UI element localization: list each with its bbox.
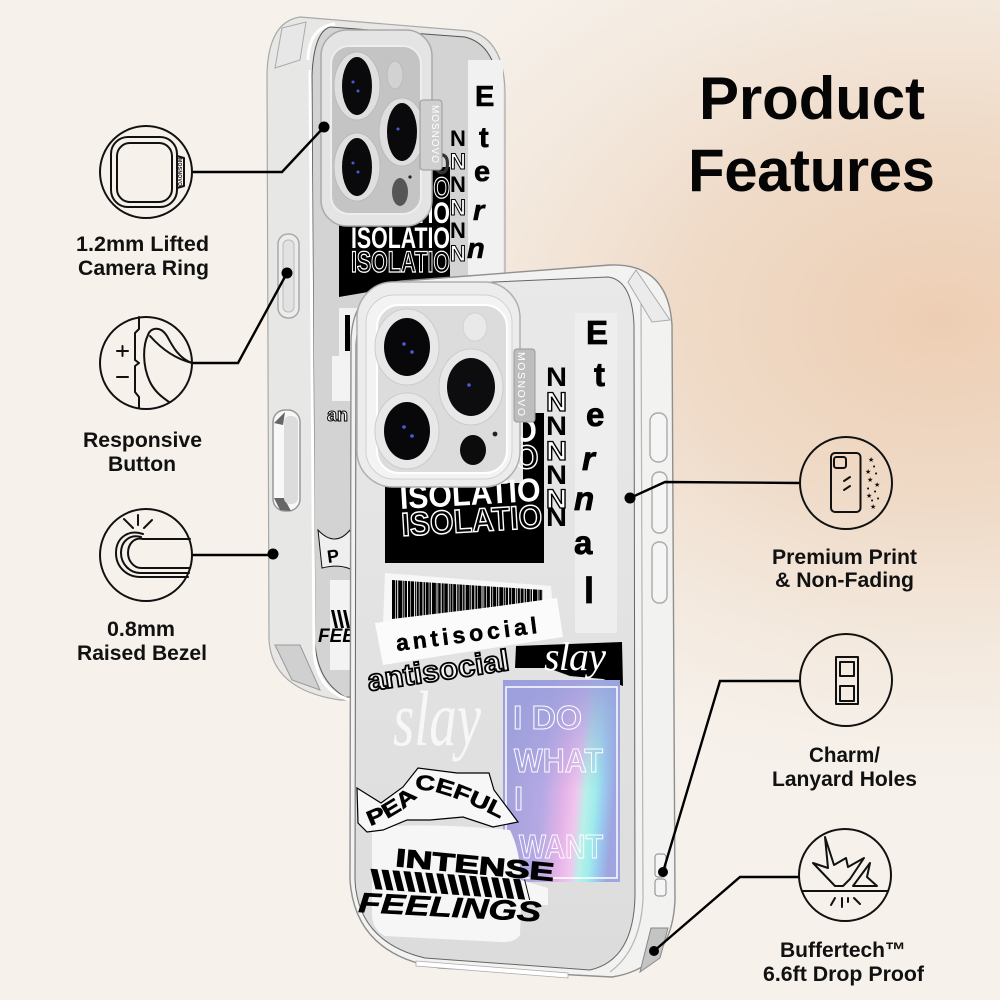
connector: lanyard holes: [658, 681, 800, 877]
front phone back panel: [355, 277, 635, 970]
front phone case body: [350, 265, 675, 977]
isolation repeated text: ISOLATIO: [400, 498, 543, 543]
barcode sticker: [383, 573, 553, 625]
back phone camera tab: MOSNOVO: [429, 105, 440, 163]
isolation repeated text: ISOLATIO: [397, 438, 540, 483]
icon: camera ring: [100, 126, 192, 218]
holographic card: I: [514, 780, 523, 817]
eternal letters: [574, 314, 608, 611]
isolation block: [385, 413, 544, 563]
label: responsive button: Button: [108, 453, 176, 476]
eternal letters: r: [582, 440, 597, 477]
label: camera ring: Camera Ring: [78, 257, 209, 280]
isolation repeated text: [392, 361, 543, 543]
icon: impact: [799, 829, 891, 921]
label: drop proof: Buffertech™: [780, 939, 906, 962]
repeated N column: N: [546, 387, 567, 417]
back phone white strip: [468, 60, 503, 285]
feature: premium print: [772, 437, 917, 592]
label: drop proof: 6.6ft Drop Proof: [763, 963, 925, 986]
back phone isolation text: ISOLATIO: [351, 246, 450, 279]
label: lanyard holes: [772, 744, 917, 791]
back phone case body: [267, 17, 505, 700]
front phone bottom-right bumper: [640, 928, 668, 972]
peaceful ribbon: PEACEFUL: [366, 775, 501, 826]
feature: responsive button: [83, 317, 202, 476]
isolation repeated text: ISOLATIO: [395, 411, 538, 456]
outlined antisocial text: antisocial: [365, 644, 511, 698]
back phone lower artwork: P: [326, 545, 340, 567]
repeated N column: N: [546, 411, 567, 441]
icon: phone with stars: •: [874, 470, 878, 478]
label: premium print: & Non-Fading: [775, 569, 914, 592]
label: responsive button: [83, 429, 202, 476]
holographic card: WANT: [519, 828, 603, 865]
back phone isolation text: N: [450, 172, 466, 197]
eternal letters: E: [586, 314, 608, 351]
label: raised bezel: 0.8mm: [107, 618, 175, 641]
connector: responsive button: [192, 268, 292, 363]
back phone camera module: [321, 30, 432, 226]
icon: bezel: [100, 509, 192, 601]
icon: lanyard holes: [800, 634, 892, 726]
back phone panel: [312, 27, 499, 700]
repeated N column: N: [546, 460, 567, 490]
label: raised bezel: [77, 618, 207, 665]
feelings text: FEELINGS: [358, 887, 542, 928]
back phone isolation text: ISOLATIO: [351, 197, 450, 230]
label: lanyard holes: Charm/: [809, 744, 880, 767]
icon: phone with stars: ★: [874, 481, 880, 489]
label: premium print: Premium Print: [772, 546, 917, 569]
eternal letters: a: [574, 524, 593, 561]
icon: phone with stars: ★: [868, 456, 874, 464]
eternal letters: n: [574, 480, 594, 517]
front camera tab: [514, 349, 535, 422]
lens two: [439, 349, 503, 425]
lidar sensor: [460, 435, 486, 465]
icon: phone with stars: ★: [870, 503, 876, 511]
front phone: [349, 264, 676, 978]
repeated N column: N: [546, 484, 567, 514]
front phone side button one: [650, 413, 667, 462]
eternal letters: e: [586, 396, 604, 433]
eternal letters: t: [594, 356, 605, 393]
back phone lower artwork: [317, 308, 358, 670]
label: raised bezel: Raised Bezel: [77, 642, 207, 665]
back phone isolation text: ISOLATIO: [351, 222, 450, 255]
back phone isolation text: ISOLATIO: [351, 148, 450, 181]
feature: raised bezel: [77, 509, 207, 665]
connector: camera ring: [192, 122, 330, 172]
front phone lanyard holes: [655, 854, 666, 896]
connector: drop proof: [649, 877, 799, 956]
repeated N column: N: [546, 436, 567, 466]
back phone lower artwork: FEEL: [318, 626, 367, 647]
front phone frame line: [610, 300, 643, 972]
front camera module: [357, 282, 520, 487]
back phone eternal letters: e: [474, 156, 490, 188]
flash: [463, 313, 487, 341]
back phone eternal letters: t: [479, 122, 489, 154]
back phone isolation text: [351, 126, 466, 279]
label: premium print: [772, 546, 917, 592]
feature: camera ring: [76, 126, 209, 280]
front camera tab: MOSNOVO: [515, 352, 527, 416]
isolation repeated text: ISOLATIO: [394, 385, 536, 430]
lens three: [375, 393, 439, 469]
back phone isolation block: [339, 167, 450, 297]
icon: phone with stars: •: [866, 485, 870, 493]
connector: raised bezel: [192, 548, 278, 560]
back phone bottom bumper: [275, 645, 320, 690]
label: camera ring: 1.2mm Lifted: [76, 233, 209, 256]
back phone isolation text: N: [450, 149, 466, 174]
front phone bottom strip: [416, 961, 568, 978]
back phone upper button: [278, 234, 299, 318]
microphone dot: [493, 432, 497, 436]
holographic card: WHAT: [514, 742, 603, 779]
icon: phone with stars: ★: [865, 468, 871, 476]
back phone isolation text: N: [450, 126, 466, 151]
icon: phone with stars: •: [873, 488, 877, 496]
back phone isolation text: N: [450, 195, 466, 220]
back phone corner bumper: [275, 22, 306, 68]
holographic card: [503, 680, 620, 882]
back phone camera tab: [420, 100, 442, 170]
isolation repeated text: ISOLATIO: [392, 361, 535, 406]
icon: phone with stars: •: [876, 495, 880, 503]
feature: drop proof: [763, 829, 925, 986]
label: lanyard holes: Lanyard Holes: [772, 768, 917, 791]
eternal paper strip: [575, 313, 617, 633]
title: [688, 65, 935, 204]
back phone isolation text: N: [450, 241, 466, 266]
black stripes: [373, 879, 528, 890]
eternal letters: l: [584, 570, 594, 611]
back phone eternal letters: [467, 81, 494, 265]
icon: phone with stars: •: [870, 497, 874, 505]
connector: premium print: [624, 482, 800, 504]
repeated N column: N: [546, 362, 567, 392]
title: Product: [699, 65, 925, 132]
label: drop proof: [763, 939, 925, 986]
front phone top-right bumper: [628, 270, 670, 322]
back phone lower artwork: an: [327, 405, 348, 425]
back phone: [267, 17, 505, 700]
back phone eternal letters: E: [475, 81, 494, 113]
feature: lanyard holes: [772, 634, 917, 791]
repeated N column: [546, 362, 567, 532]
back phone eternal letters: r: [473, 195, 486, 227]
back phone lower button: [273, 410, 300, 511]
antisocial label: antisocial: [394, 612, 538, 656]
holographic card: I DO: [513, 699, 582, 736]
front phone side button three: [652, 542, 667, 603]
label: responsive button: Responsive: [83, 429, 202, 452]
front phone side button two: [652, 472, 667, 533]
white slay script: slay: [393, 675, 481, 762]
title: Features: [688, 137, 935, 204]
icon: phone with stars: ★: [866, 492, 872, 500]
intense text: INTENSE: [394, 844, 555, 887]
back phone isolation text: N: [450, 218, 466, 243]
icon: phone with stars: [800, 437, 892, 529]
back phone isolation text: ISOLATIO: [351, 172, 450, 205]
antisocial label: [375, 598, 563, 665]
icon: phone with stars: ★: [867, 476, 873, 484]
back phone frame line: [308, 24, 350, 700]
repeated N column: N: [546, 502, 567, 532]
black slay banner: slay: [544, 634, 606, 679]
isolation repeated text: ISOLATIO: [399, 471, 542, 516]
icon: camera ring: MOSNOVO: [176, 158, 182, 186]
black slay banner: [515, 634, 623, 686]
white tape patch: [372, 825, 548, 942]
icon: phone with stars: •: [872, 463, 876, 471]
lens one: [375, 309, 439, 385]
icon: side button: [100, 317, 192, 409]
label: camera ring: [76, 233, 209, 280]
back phone eternal letters: n: [467, 233, 485, 265]
